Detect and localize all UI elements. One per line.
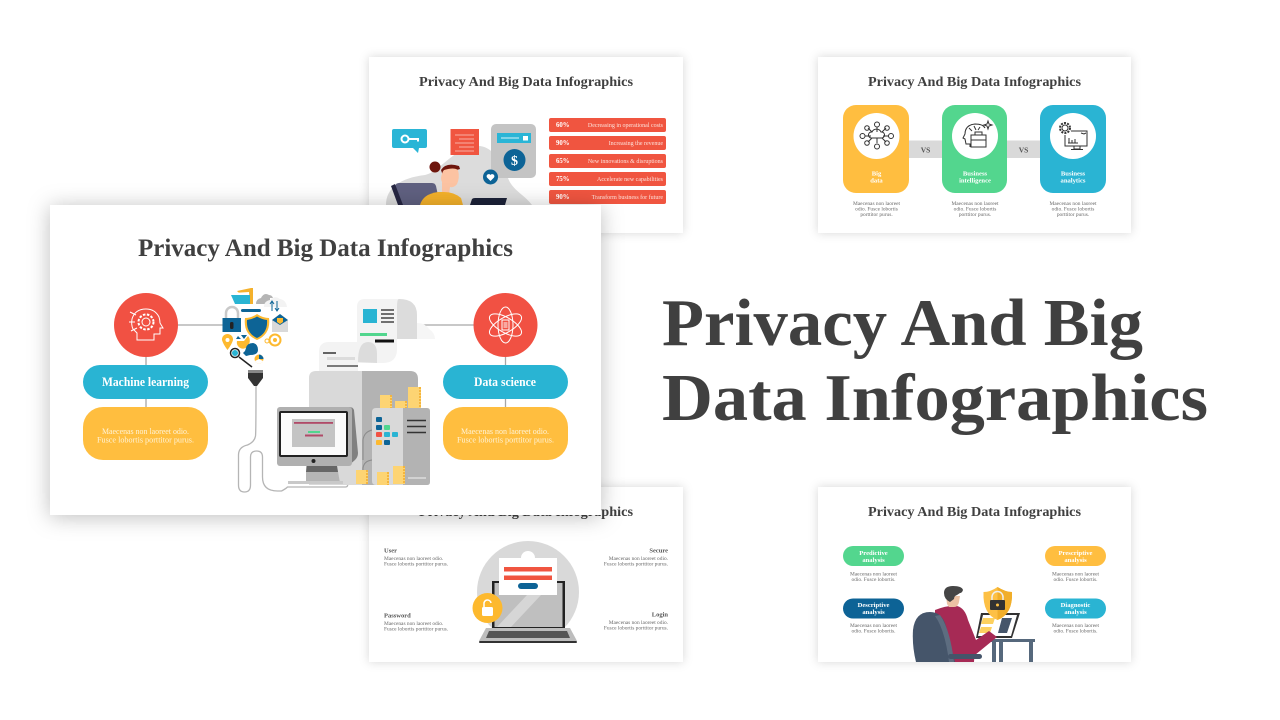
pill: predictive analysis: analysis [862, 557, 885, 564]
stat bars list: Increasing the revenue [609, 141, 663, 147]
icon: shield [245, 314, 269, 340]
text: password: Maecenas non laoreet odio. [384, 621, 443, 627]
card descriptions: Maecenas non laoreet [952, 201, 999, 207]
card: business analytics: Business [1061, 170, 1086, 178]
text: secure: Fusce lobortis porttitor purus. [604, 562, 668, 568]
pill: diagnostic analysis: Maecenas non laoreet [1052, 623, 1099, 629]
card descriptions: porttitor purus. [860, 212, 893, 218]
node: data science: Data science [474, 375, 536, 389]
stat bars list: 90% [556, 140, 570, 147]
pill: predictive analysis: Maecenas non laoreet [850, 572, 897, 578]
pill: descriptive analysis: analysis [862, 609, 885, 616]
node: data science [443, 293, 568, 460]
card descriptions: Maecenas non laoreet [853, 201, 900, 207]
card: business analytics: analytics [1061, 178, 1086, 184]
text: password [384, 612, 448, 632]
node: machine learning: Maecenas non laoreet odio. [102, 427, 189, 436]
text: secure: Secure [649, 548, 668, 554]
stat bars list [549, 118, 666, 204]
vs connectors: VS [1019, 146, 1028, 154]
icon: pie chart [236, 335, 250, 349]
pill: diagnostic analysis: odio. Fusce lobortis. [1053, 628, 1098, 634]
card descriptions [853, 201, 1097, 218]
stat bars list: Decreasing in operational costs [588, 123, 664, 129]
slide: big data vs business cards preview [818, 57, 1131, 233]
pill: prescriptive analysis: Prescriptive [1059, 550, 1093, 557]
text: user: Fusce lobortis porttitor purus. [384, 562, 448, 568]
icon: padlock [222, 307, 241, 332]
icon: atom [486, 307, 525, 343]
text: secure [604, 548, 668, 568]
card: business analytics [1040, 105, 1106, 193]
icon: network cloud [860, 122, 894, 149]
illustration: man at laptop with shield [913, 586, 1035, 662]
icon: clouds [256, 294, 273, 304]
icon: light bulb [243, 343, 258, 356]
icon: pencil [241, 309, 261, 312]
main heading [662, 286, 1208, 435]
slide: login laptop preview [369, 487, 683, 662]
pill: predictive analysis [843, 546, 904, 583]
pill: diagnostic analysis: Diagnostic [1061, 602, 1090, 609]
card: business intelligence: Business [963, 170, 988, 178]
illustration: coin stacks [380, 387, 421, 410]
slide: main featured [50, 205, 601, 515]
node: machine learning: Fusce lobortis porttitor purus. [97, 436, 194, 444]
illustration: laptop login [472, 541, 579, 643]
node: machine learning [83, 293, 208, 460]
illustration: main server [309, 371, 418, 485]
main heading: Data Infographics [662, 361, 1208, 435]
pill: prescriptive analysis: analysis [1064, 557, 1087, 564]
icon: map pin [222, 334, 233, 350]
vs connectors: VS [921, 146, 930, 154]
card: business intelligence: intelligence [959, 178, 991, 184]
card: big data: Big [872, 170, 882, 178]
pill: prescriptive analysis: odio. Fusce lobortis. [1053, 577, 1098, 583]
stat bars list: Accelerate new capabilities [597, 177, 664, 183]
icon: target [265, 334, 280, 346]
text: password: Password [384, 612, 411, 620]
card: business intelligence [942, 105, 1007, 193]
text: secure: Maecenas non laoreet odio. [609, 556, 668, 562]
pill: descriptive analysis: Maecenas non laoreet [850, 623, 897, 629]
connector lines [146, 325, 506, 407]
pill: predictive analysis: Predictive [859, 550, 888, 557]
icon: envelope [272, 314, 288, 332]
stat bars list: Transform business for future [592, 194, 663, 201]
card: big data [843, 105, 909, 193]
pill: descriptive analysis: odio. Fusce lobortis. [851, 628, 896, 634]
text: login: Maecenas non laoreet odio. [609, 620, 668, 626]
illustration: woman with security icons: $ [511, 154, 518, 169]
card descriptions: odio. Fusce lobortis [855, 206, 898, 212]
card descriptions: odio. Fusce lobortis [1052, 206, 1094, 212]
text: login: Login [652, 612, 668, 618]
slide title: Privacy And Big Data Infographics [868, 505, 1082, 520]
icon: folder [231, 288, 253, 304]
pill: diagnostic analysis: analysis [1064, 609, 1087, 616]
icon: monitor with gear [1060, 123, 1087, 150]
illustration: second server [356, 408, 430, 485]
pill: diagnostic analysis [1045, 598, 1106, 634]
stat bars list: 65% [556, 158, 570, 165]
stat bars list: 90% [556, 194, 570, 201]
pill: prescriptive analysis [1045, 546, 1106, 583]
slide title: Privacy And Big Data Infographics [419, 505, 634, 520]
icon: funnel with cable [238, 370, 348, 492]
text: user: User [384, 548, 397, 554]
card descriptions: Maecenas non laoreet [1050, 201, 1097, 207]
text: password: Fusce lobortis porttitor purus. [384, 626, 448, 632]
icon: magnifier [230, 348, 252, 367]
illustration: data icons cluster [222, 288, 288, 367]
pill: prescriptive analysis: Maecenas non laoreet [1052, 572, 1099, 578]
slide title: Privacy And Big Data Infographics [868, 75, 1082, 90]
stat bars list: 75% [556, 176, 570, 183]
icon: small pie [254, 354, 264, 364]
illustration: receipts [319, 299, 435, 372]
card descriptions: odio. Fusce lobortis [954, 206, 996, 212]
illustration: woman with security icons [386, 124, 536, 205]
card descriptions: porttitor purus. [1057, 212, 1089, 218]
text: login [604, 612, 668, 632]
stat bars list: 60% [556, 122, 570, 129]
slide title: Privacy And Big Data Infographics [419, 75, 634, 90]
slide: analysis types preview [818, 487, 1131, 662]
pill: descriptive analysis [843, 598, 904, 634]
text: user [384, 548, 448, 568]
pill: descriptive analysis: Descriptive [858, 602, 890, 609]
node: data science: Fusce lobortis porttitor purus. [457, 436, 554, 444]
pill: predictive analysis: odio. Fusce lobortis. [851, 577, 896, 583]
main heading: Privacy And Big [662, 286, 1143, 360]
card descriptions: porttitor purus. [959, 212, 991, 218]
stat bars list: New innovations & disruptions [588, 159, 664, 165]
slide title: Privacy And Big Data Infographics [138, 235, 513, 262]
icon: brain with briefcase [963, 121, 992, 147]
slide: statistics bars preview [369, 57, 683, 233]
text: login: Fusce lobortis porttitor purus. [604, 626, 668, 632]
card: big data: data [870, 178, 883, 184]
icon: head with gear [129, 309, 163, 340]
node: data science: Maecenas non laoreet odio. [461, 427, 549, 436]
text: user: Maecenas non laoreet odio. [384, 556, 443, 562]
vs connectors [909, 140, 1040, 158]
illustration: desktop monitor [277, 407, 358, 484]
node: machine learning: Machine learning [102, 375, 190, 389]
